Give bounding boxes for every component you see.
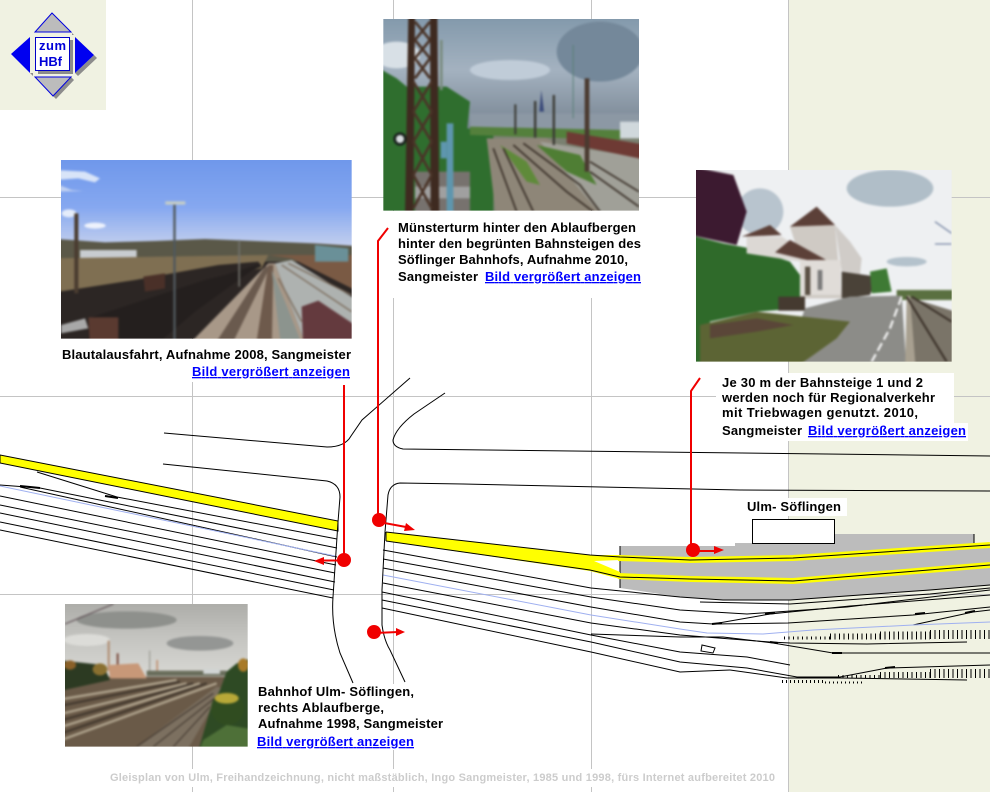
right yellow platform bbox=[386, 532, 990, 581]
photo 3 caption: Sangmeister bbox=[722, 423, 802, 438]
photo 4 caption: Aufnahme 1998, Sangmeister bbox=[258, 716, 443, 731]
station name label: Ulm- Söflingen bbox=[747, 499, 841, 514]
track plan bbox=[0, 378, 990, 683]
photo 3 caption: Je 30 m der Bahnsteige 1 und 2 bbox=[722, 375, 923, 390]
red marker: Bahnhof Ulm-Söflingen bbox=[367, 625, 405, 639]
photo 4 caption: Bahnhof Ulm- Söflingen, bbox=[258, 684, 414, 699]
navigation button: zum HBf: zum bbox=[39, 38, 66, 53]
red marker: Bahnsteige bbox=[686, 378, 724, 557]
photo 4: station overview 1998 bbox=[65, 604, 248, 747]
photo 3 caption bbox=[716, 373, 968, 441]
station building bbox=[752, 520, 834, 544]
photo 1 caption bbox=[390, 211, 646, 298]
photo 3 caption: mit Triebwagen genutzt. 2010, bbox=[722, 405, 918, 420]
photo 3 caption: werden noch für Regionalverkehr bbox=[721, 390, 935, 405]
photo 1: Münsterturm view bbox=[383, 19, 639, 211]
sidings hatch bbox=[782, 634, 990, 682]
photo 4 caption: Bild vergrößert anzeigen bbox=[257, 734, 414, 749]
left track bundle bbox=[0, 472, 337, 598]
footer credit bbox=[108, 769, 778, 787]
photo 2 caption: Bild vergrößert anzeigen bbox=[192, 364, 350, 379]
photo 2 caption bbox=[58, 339, 354, 382]
navigation button: zum HBf: HBf bbox=[39, 54, 63, 69]
red marker: Münsterturm bbox=[372, 228, 415, 531]
right beige strip bbox=[788, 0, 990, 792]
photo 1 caption: Bild vergrößert anzeigen bbox=[485, 269, 641, 284]
corridor boundary lines bbox=[163, 378, 990, 683]
photo 1 caption: Söflinger Bahnhofs, Aufnahme 2010, bbox=[398, 252, 628, 267]
photo 4 caption: rechts Ablaufberge, bbox=[258, 700, 384, 715]
photo 3: station building bbox=[696, 170, 952, 362]
navigation button: zum HBf bbox=[0, 0, 106, 110]
photo 1 caption: hinter den begrünten Bahnsteigen des bbox=[398, 236, 641, 251]
right track bundle bbox=[382, 550, 990, 682]
red marker: Blautalausfahrt bbox=[314, 385, 351, 567]
photo 4 caption bbox=[254, 684, 448, 750]
photo 2 caption: Blautalausfahrt, Aufnahme 2008, Sangmeister bbox=[62, 347, 351, 362]
left yellow platform bbox=[0, 455, 338, 531]
photo 1 caption: Münsterturm hinter den Ablaufbergen bbox=[398, 220, 636, 235]
photo 2: Blautalausfahrt bbox=[61, 160, 352, 339]
footer credit: Gleisplan von Ulm, Freihandzeichnung, nicht maßstäblich, Ingo Sangmeister, 1985 und 1998, fürs Internet aufbereitet 2010 bbox=[110, 772, 775, 784]
photo 1 caption: Sangmeister bbox=[398, 269, 478, 284]
platform area, grey bbox=[620, 534, 990, 600]
photo 3 caption: Bild vergrößert anzeigen bbox=[808, 423, 966, 438]
